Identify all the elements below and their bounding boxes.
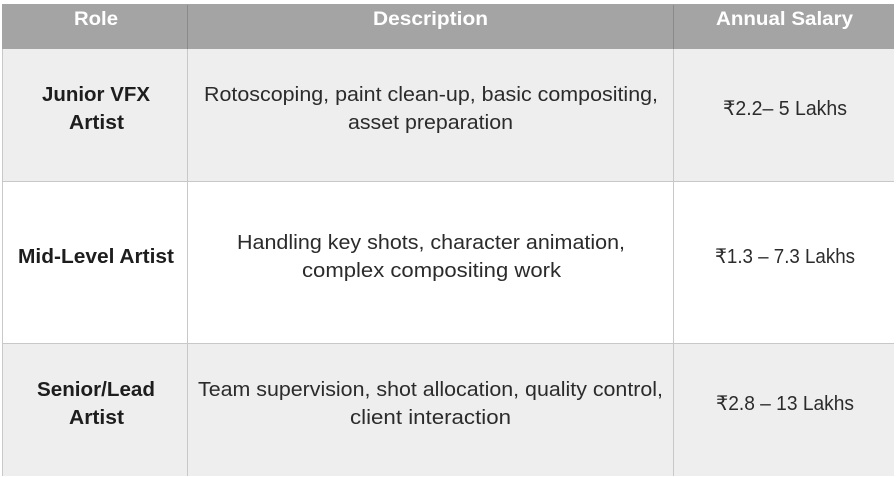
description: junior bbox=[204, 84, 658, 134]
role: junior VFX artist: Junior VFX bbox=[42, 84, 151, 106]
heading: description: Description bbox=[373, 8, 488, 30]
description: mid-level bbox=[237, 232, 625, 282]
description: junior: Rotoscoping, paint clean-up, basic compositing, bbox=[204, 84, 658, 106]
description: senior bbox=[198, 379, 663, 429]
role: mid-level artist: Mid-Level Artist bbox=[18, 246, 174, 268]
role: senior/lead artist bbox=[37, 379, 155, 429]
description: mid-level: complex compositing work bbox=[302, 260, 562, 282]
row: senior/lead artist bbox=[2, 344, 894, 476]
heading: annual salary: Annual Salary bbox=[716, 8, 853, 30]
description: senior: client interaction bbox=[350, 407, 511, 429]
row: mid-level artist bbox=[2, 182, 894, 344]
header row bbox=[2, 4, 894, 49]
heading: role: Role bbox=[74, 8, 118, 30]
row: junior VFX artist bbox=[2, 49, 894, 182]
salary: mid-level: ₹1.3 – 7.3 Lakhs bbox=[715, 246, 855, 268]
description: senior: Team supervision, shot allocation, quality control, bbox=[198, 379, 663, 401]
role: senior/lead artist: Senior/Lead bbox=[37, 379, 155, 401]
role: junior VFX artist bbox=[42, 84, 151, 134]
salary: junior: ₹2.2– 5 Lakhs bbox=[723, 98, 847, 120]
description: junior: asset preparation bbox=[348, 112, 513, 134]
salary: senior: ₹2.8 – 13 Lakhs bbox=[716, 393, 854, 415]
description: mid-level: Handling key shots, character animation, bbox=[237, 232, 625, 254]
role: senior/lead artist: Artist bbox=[69, 407, 124, 429]
role: junior VFX artist: Artist bbox=[69, 112, 124, 134]
